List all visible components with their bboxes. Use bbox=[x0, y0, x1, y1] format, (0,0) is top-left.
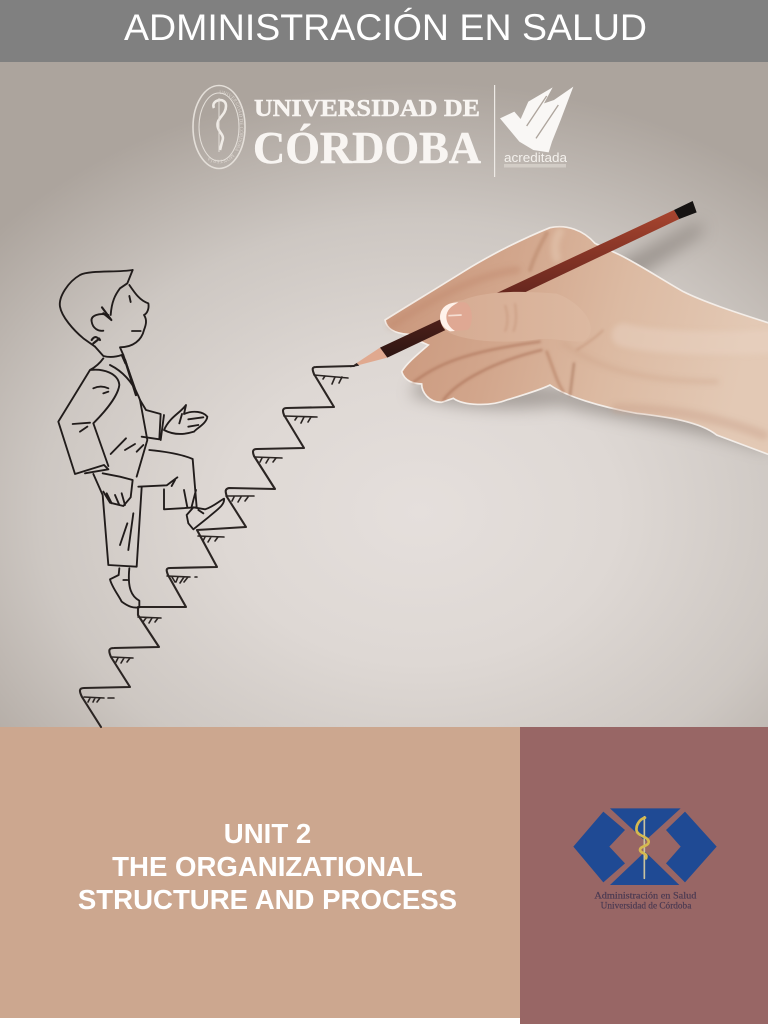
header band bbox=[0, 0, 768, 62]
logo caption bbox=[594, 890, 697, 911]
university logo bbox=[192, 84, 574, 177]
raised leg bbox=[138, 450, 197, 509]
panel: tan unit title bbox=[0, 727, 520, 1018]
right logo bbox=[573, 808, 717, 911]
pencil bbox=[350, 201, 697, 367]
thumb bbox=[440, 292, 591, 342]
university name: UNIVERSIDAD DE bbox=[254, 96, 480, 122]
icon: accreditation check mark bbox=[500, 87, 573, 152]
icon: rod and serpent bbox=[636, 817, 649, 878]
hand base bbox=[385, 227, 768, 455]
face bbox=[120, 285, 149, 355]
logo diamonds bbox=[573, 808, 717, 885]
unit title bbox=[78, 818, 457, 915]
stair outline bbox=[80, 366, 354, 727]
boy figure bbox=[58, 270, 224, 608]
collar and tie bbox=[95, 347, 137, 393]
icon: university seal: UNIVERSIDAD DE CÓRDOBA · MONTERÍA bbox=[208, 90, 244, 164]
logo divider bbox=[494, 85, 495, 177]
ear bbox=[91, 314, 108, 331]
logo caption: Universidad de Córdoba bbox=[601, 900, 692, 911]
thumb creases bbox=[505, 303, 603, 350]
forearm and cuff bbox=[140, 400, 164, 440]
resting hand bbox=[103, 473, 133, 506]
background illustration panel bbox=[0, 62, 768, 727]
university name bbox=[253, 96, 481, 173]
panel: maroon logo background bbox=[520, 727, 768, 1024]
unit title: STRUCTURE AND PROCESS bbox=[78, 884, 457, 915]
title: ADMINISTRACIÓN EN SALUD bbox=[124, 6, 647, 48]
raised hand bbox=[164, 405, 207, 434]
university name: CÓRDOBA bbox=[253, 123, 481, 173]
standing leg bbox=[93, 474, 142, 567]
coat and sleeve bbox=[58, 358, 119, 474]
hand holding pencil bbox=[350, 201, 768, 455]
icon: university seal bbox=[192, 84, 246, 170]
thumbnail bbox=[440, 302, 472, 331]
hand shadow bbox=[410, 222, 768, 450]
standing foot bbox=[110, 568, 139, 608]
raised foot bbox=[187, 499, 224, 529]
accreditation label: acreditada bbox=[504, 151, 567, 165]
hand shading bbox=[392, 232, 768, 435]
logo caption: Administración en Salud bbox=[594, 890, 697, 901]
stair hatching bbox=[84, 375, 348, 702]
staircase drawing bbox=[80, 366, 354, 727]
hair bbox=[60, 270, 133, 347]
unit title: UNIT 2 bbox=[224, 818, 311, 849]
unit title: THE ORGANIZATIONAL bbox=[112, 851, 423, 882]
